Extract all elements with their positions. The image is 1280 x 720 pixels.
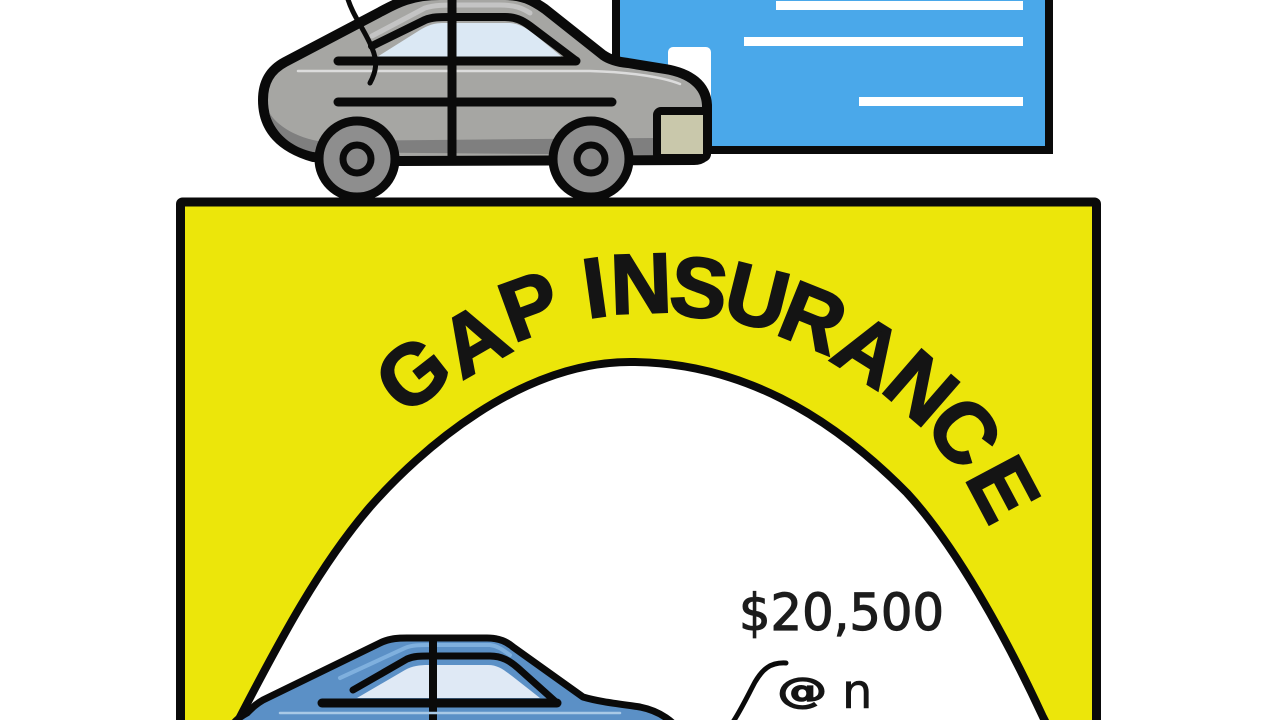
garbled label with swirl: @ xyxy=(777,670,827,712)
heading: curved title: G xyxy=(358,317,469,432)
panel: blue document card xyxy=(616,0,1049,150)
heading: curved title: R xyxy=(767,263,859,374)
heading: curved title: N xyxy=(866,332,975,444)
price label: $20,500 xyxy=(739,584,944,643)
heading: curved title: U xyxy=(716,244,798,351)
heading: curved title: A xyxy=(424,284,525,397)
heading: curved title: S xyxy=(665,238,733,339)
heading: curved title: N xyxy=(609,236,673,333)
icon: grey car xyxy=(263,0,707,197)
heading: curved title: E xyxy=(947,442,1058,537)
icon: blue car xyxy=(228,638,682,720)
heading: curved title: I xyxy=(577,240,613,337)
white arch xyxy=(222,362,1060,720)
heading: curved title xyxy=(358,236,1058,537)
heading: curved title: P xyxy=(487,252,573,361)
heading: curved title: A xyxy=(818,295,920,408)
panel: yellow gap insurance panel xyxy=(180,202,1096,720)
garbled label with swirl: n xyxy=(842,664,872,720)
garbled label with swirl xyxy=(733,663,872,720)
heading: curved title: C xyxy=(907,379,1020,486)
